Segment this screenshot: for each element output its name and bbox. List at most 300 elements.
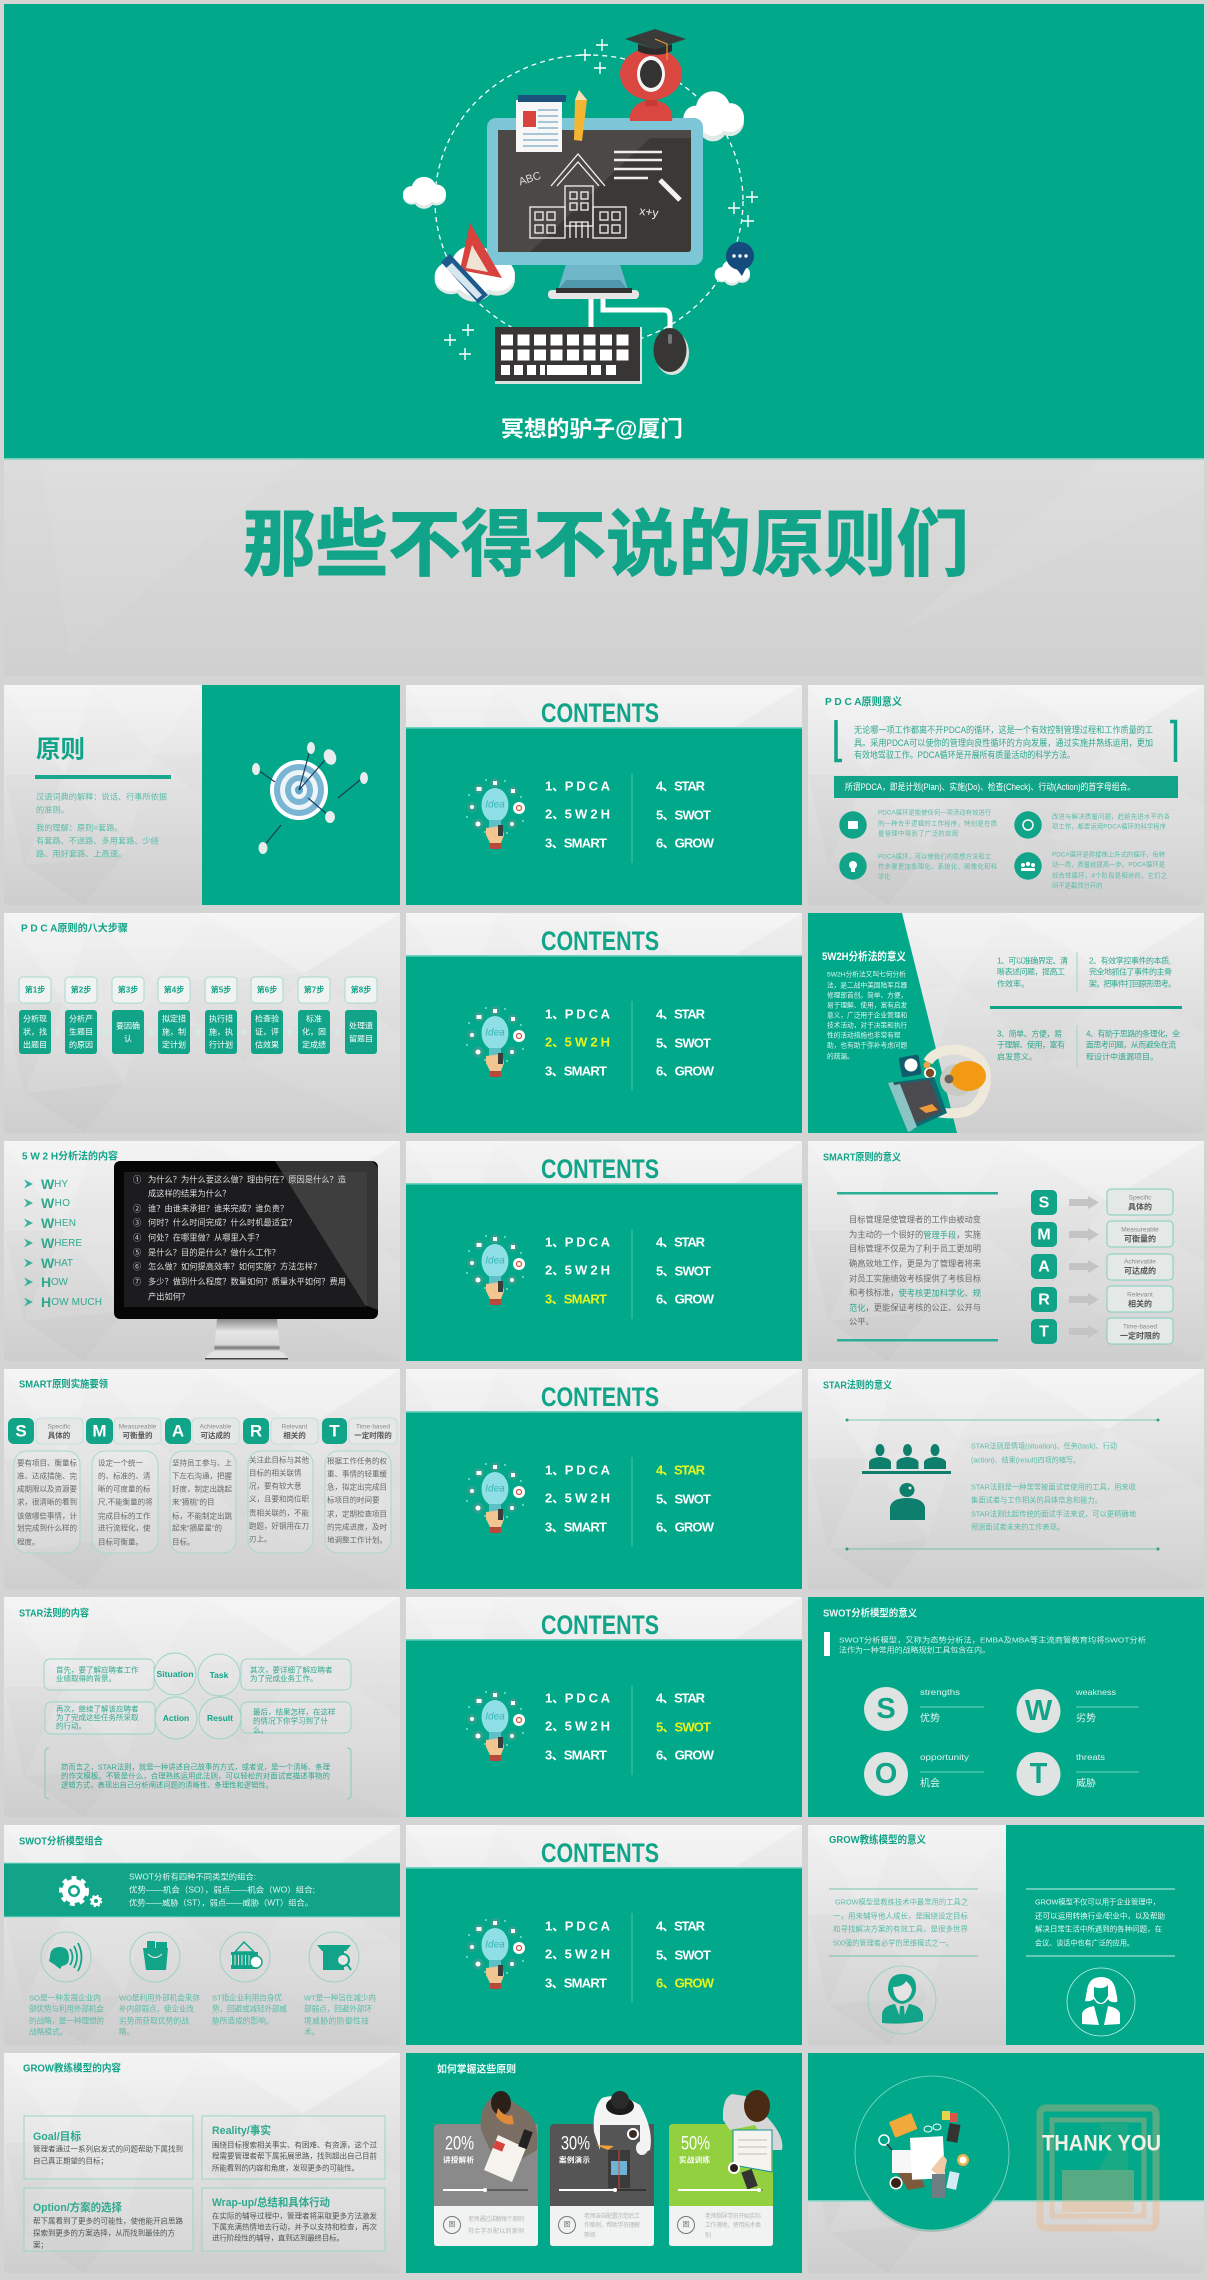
heading: CONTENTS <box>541 926 659 956</box>
icon: idea bulb <box>466 778 525 849</box>
icon: four circled pictograms <box>41 1932 359 1982</box>
contents list: 5、SWOT <box>656 808 711 822</box>
card: 30%: 作案例，帮助学员理解 <box>584 2221 640 2229</box>
contents list <box>545 778 715 850</box>
icon: brackets <box>836 720 1176 762</box>
label texts: Achievable <box>200 1424 232 1430</box>
boxes <box>44 1659 351 1734</box>
text blocks: 面思考问题，从而避免在流 <box>1086 1040 1176 1050</box>
contents list: 6、GROW <box>656 1520 715 1534</box>
contents list: 3、SMART <box>545 1064 607 1078</box>
arrows <box>1069 1196 1099 1338</box>
label texts: Specific <box>1129 1194 1152 1202</box>
step labels <box>25 984 371 994</box>
box headings: Wrap-up/总结和具体行动 <box>212 2195 330 2209</box>
contents list: 3、SMART <box>545 1292 607 1306</box>
card texts: 的完成进度，及时 <box>327 1522 387 1532</box>
step texts: 施，执 <box>209 1026 233 1036</box>
text block: questions: ② <box>133 1204 141 1214</box>
step texts: 定成绩 <box>302 1040 326 1050</box>
card texts: 急，拟定出完成目 <box>327 1482 387 1492</box>
icon: sparkles <box>444 39 758 360</box>
text block: 法作为一种常用的战略规划工具包含在内。 <box>839 1644 990 1654</box>
card texts: 地调整工作计划。 <box>327 1534 387 1544</box>
text block: 范化，更能保证考核的公正、公开与 <box>849 1302 981 1312</box>
step tabs <box>19 977 377 1003</box>
contents list: 2、5 W 2 H <box>545 1490 610 1506</box>
SWOT circles: S <box>876 1693 896 1725</box>
label texts: 可衡量的 <box>122 1430 153 1440</box>
card: 30%: 图 <box>564 2220 570 2228</box>
step labels: 第8步 <box>351 984 371 994</box>
icon: clouds <box>403 91 750 302</box>
text block: 易于理解、使用，富有启发 <box>827 1000 908 1010</box>
SWOT circles: O <box>875 1758 897 1790</box>
heading: CONTENTS <box>541 1838 659 1868</box>
label texts: Achievable <box>1124 1258 1156 1266</box>
text block: 的疏漏。 <box>827 1052 854 1060</box>
text blocks: 晰表述问题，提高工 <box>997 966 1065 976</box>
text blocks: 启发意义。 <box>997 1052 1037 1062</box>
text block: 集面试者与工作相关的具体信息和能力。 <box>971 1494 1102 1504</box>
panel: contents PDCA <box>406 685 802 905</box>
icon: keyboard <box>495 327 642 384</box>
card texts: 标，不能制定出跳 <box>172 1510 232 1520</box>
text block: 我的理解：原则=套路。 <box>36 822 123 832</box>
contents list <box>545 1234 715 1306</box>
text blocks: 学化 <box>878 872 891 880</box>
list: question words: HOW MUCH <box>41 1294 102 1310</box>
card texts: 该做哪些事情，计 <box>17 1510 77 1520</box>
text block: 的作文模板。不管是什么，合理熟练运用此法则，可以轻松的对面试官描述事物的 <box>61 1772 330 1780</box>
text block: questions: ⑤ <box>133 1248 141 1258</box>
step texts: 定计划 <box>162 1040 186 1050</box>
card texts: 重、事情的轻重缓 <box>327 1468 387 1478</box>
contents list: 2、5 W 2 H <box>545 1262 610 1278</box>
contents list: 3、SMART <box>545 1976 607 1990</box>
SWOT labels: 机会 <box>920 1776 940 1790</box>
panel: GROW contents <box>4 2053 400 2273</box>
list: question words: HOW <box>41 1274 69 1290</box>
box texts: 其次，要详细了解应聘者 <box>250 1664 333 1674</box>
text block: 的准则。 <box>36 804 69 814</box>
text block: (action)、结果(result)四项的缩写。 <box>971 1454 1080 1464</box>
text blocks: 术。 <box>304 2026 319 2036</box>
card texts: 完成目标的工作 <box>98 1510 151 1520</box>
box texts: 的情况下你学习到了什 <box>253 1716 328 1726</box>
card texts: 起来“摘星星”的 <box>172 1522 222 1532</box>
contents list: 1、P D C A <box>545 778 611 794</box>
panel: 5W2H meaning <box>808 913 1204 1133</box>
box headings: Reality/事实 <box>212 2123 271 2137</box>
card texts: 尺,不能衡量的将 <box>98 1496 153 1506</box>
icon: gears <box>62 1879 101 1906</box>
label texts <box>1120 1194 1160 1340</box>
SWOT circles: T <box>1030 1758 1048 1790</box>
icon: person at laptop <box>888 1050 986 1132</box>
card: 20%: 图 <box>448 2220 456 2228</box>
text blocks: 综合性循环，4个阶段是相对的，它们之 <box>1052 870 1168 880</box>
circle labels: Result <box>207 1713 233 1723</box>
text block: questions: 多少？做到什么程度？数量如何？质量水平如何？费用 <box>148 1276 346 1286</box>
text block: 优势——机会（SO），弱点——机会（WO）组合; <box>129 1884 315 1894</box>
text block: questions: 谁？由谁来承担？谁来完成？谁负责？ <box>148 1204 288 1214</box>
text blocks: 完全地抓住了事件的主骨 <box>1089 966 1172 976</box>
text block: 逻辑方式，表现出自己分析阐述问题的清晰性、条理性和逻辑性。 <box>61 1780 273 1790</box>
contents list: 4、STAR <box>656 1918 706 1934</box>
text block <box>971 1440 1136 1532</box>
boxes <box>24 2116 385 2251</box>
panel: STAR contents <box>4 1597 400 1817</box>
text blocks: 动一周，质量就提高一步。PDCA循环是 <box>1052 860 1166 868</box>
text block: 目标管理是使管理者的工作由被动变 <box>849 1214 981 1224</box>
text blocks: 战略模式。 <box>29 2026 67 2036</box>
card texts: 目标可衡量。 <box>98 1536 143 1546</box>
text blocks: ST指企业利用自身优 <box>212 1992 282 2002</box>
text blocks: 间不是截然分开的 <box>1052 880 1102 890</box>
contents list: 6、GROW <box>656 1748 715 1762</box>
box texts: 自己真正期望的目标； <box>33 2156 108 2166</box>
step connectors <box>55 1029 340 1035</box>
card: 50%: 实战训练 <box>679 2154 710 2164</box>
label texts: Time-based <box>356 1424 390 1430</box>
contents list: 1、P D C A <box>545 1006 611 1022</box>
text block: 性的活动措施也非常有帮 <box>827 1030 901 1040</box>
card texts: 坚持员工参与、上 <box>172 1458 232 1468</box>
text block: left: GROW模型是教练技术中最常用的工具之 <box>835 1896 968 1906</box>
icon: chat bubble <box>726 242 754 276</box>
card: 50%: 别 <box>705 2231 711 2239</box>
text blocks: 部优势与利用外部机会 <box>29 2004 104 2014</box>
heading: SMART原则的意义 <box>823 1150 901 1164</box>
icon: desk circle <box>855 2076 1009 2232</box>
card texts: 义，且要和岗位职 <box>249 1494 309 1504</box>
text block: 目标管理不仅是为了利于员工更加明 <box>849 1244 981 1254</box>
list: question words: WHEN <box>41 1215 76 1231</box>
label texts: Relevant <box>1127 1292 1153 1298</box>
heading: P D C A原则的八大步骤 <box>21 922 128 934</box>
panel: contents 5W2H <box>406 913 802 1133</box>
SWOT labels: threats <box>1076 1752 1105 1762</box>
card texts <box>17 1454 387 1546</box>
label texts: Relevant <box>282 1424 308 1430</box>
label texts: 一定时限的 <box>354 1430 392 1440</box>
panel: title banner <box>4 460 1204 676</box>
card: 30%: 案例演示 <box>559 2154 590 2164</box>
text blocks: 胁所造成的影响。 <box>212 2016 274 2026</box>
card texts: 目标。 <box>172 1536 194 1546</box>
text blocks: 部弱点，回避外部环 <box>304 2004 372 2014</box>
card texts: 准、达成措施、完 <box>17 1470 77 1480</box>
heading: GROW教练模型的内容 <box>23 2062 121 2074</box>
text block: 公平。 <box>849 1318 874 1326</box>
text block: 技术活动，对于决策和执行 <box>827 1020 908 1030</box>
step texts: 施，制 <box>162 1026 186 1036</box>
letter badges <box>8 1418 347 1444</box>
label texts: 一定时限的 <box>1120 1330 1160 1340</box>
panel: GROW meaning <box>808 1825 1204 2045</box>
list: question words: WHAT <box>41 1255 73 1271</box>
card: 50%: 工作落地，使用技术类 <box>705 2221 761 2229</box>
icon: dashed orbit <box>435 55 743 347</box>
panel: STAR meaning <box>808 1369 1204 1589</box>
SMART letters <box>1031 1190 1057 1344</box>
SMART letters: A <box>1038 1258 1050 1276</box>
step texts: 估效果 <box>255 1040 279 1050</box>
icon: mouse <box>654 328 689 375</box>
text blocks <box>878 808 1171 890</box>
contents list: 1、P D C A <box>545 1918 611 1934</box>
step texts: 检查验 <box>255 1014 279 1024</box>
box headings: Option/方案的选择 <box>33 2200 122 2214</box>
text blocks: 势，回避或减轻外部威 <box>212 2004 287 2014</box>
icon: computer monitor: ABC <box>517 170 543 188</box>
icons: four circles <box>839 811 1042 880</box>
text block: left: 和寻找解决方案的有效工具，是很多世界 <box>833 1924 968 1934</box>
card: 30%: 老师亲自配置示范后工 <box>584 2212 640 2220</box>
text blocks: 的战略，是一种理想的 <box>29 2016 104 2026</box>
heading: 5W2H分析法的意义 <box>822 949 906 963</box>
box texts: 帮下属看到了更多的可能性，使他能开启思路 <box>33 2216 184 2226</box>
box texts <box>33 2140 378 2250</box>
SMART letters: T <box>1039 1324 1049 1340</box>
card texts: 划完成到什么样的 <box>17 1522 77 1532</box>
text blocks: 架，把事件打回原形思考。 <box>1089 978 1176 988</box>
card texts: 跑题，好钢用在刀 <box>249 1520 309 1530</box>
card texts: 晰的可度量的标 <box>98 1484 151 1494</box>
SWOT labels: strengths <box>920 1687 960 1697</box>
contents list: 4、STAR <box>656 1234 706 1250</box>
step labels: 第4步 <box>164 984 184 994</box>
heading: CONTENTS <box>541 698 659 728</box>
band <box>4 1862 400 1918</box>
card: 20%: 符合学员配以的案例 <box>468 2227 524 2235</box>
card: 20% <box>434 2091 538 2246</box>
contents list: 3、SMART <box>545 1520 607 1534</box>
text block: 为主动的一个很好的管理手段，实施 <box>849 1230 981 1240</box>
card: 20%: 老师通过讲解每个原则 <box>468 2215 524 2223</box>
label boxes <box>36 1418 397 1444</box>
text block <box>854 724 1153 760</box>
text block: 有套路、不迷路、多用套路、少绕 <box>36 836 159 846</box>
icon: idea bulb <box>466 1918 525 1989</box>
panel: PDCA eight steps <box>4 913 400 1133</box>
SMART letters: M <box>1037 1226 1051 1244</box>
heading: STAR法则的意义 <box>823 1378 892 1392</box>
closing text: THANK YOU <box>1042 2130 1161 2156</box>
text blocks: PDCA循环，可以使我们的思想方法和工 <box>878 852 991 860</box>
card texts: 来“摘桃”的目 <box>172 1496 214 1506</box>
heading: 5 W 2 H分析法的内容 <box>22 1150 118 1162</box>
SWOT labels: weakness <box>1075 1687 1116 1697</box>
step texts: 执行措 <box>209 1014 233 1024</box>
panel: SWOT combinations <box>4 1825 400 2045</box>
box texts: 探索到更多的方案选择，从而找到最佳的方 <box>33 2228 176 2238</box>
icon: ruler and set square <box>441 223 502 303</box>
bracket frame <box>45 1748 351 1799</box>
card texts: 求，很清晰的看到 <box>17 1496 77 1506</box>
circle labels: Situation <box>156 1669 194 1679</box>
label texts: 相关的 <box>1128 1298 1152 1308</box>
heading: CONTENTS <box>541 1382 659 1412</box>
card: 20%: 20% <box>445 2134 474 2154</box>
text block: 路、用好套路、上高速。 <box>36 848 126 858</box>
letter badges: T <box>329 1422 340 1440</box>
text block <box>849 1214 981 1326</box>
step texts: 证，评 <box>255 1028 279 1036</box>
SWOT labels: 劣势 <box>1076 1712 1096 1724</box>
box texts: 业绩取得的背景。 <box>56 1673 116 1683</box>
text block: 汉语词典的解释：说话、行事所依据 <box>36 792 167 802</box>
box texts: 围绕目标搜索相关事实、有困难、有资源，这个过 <box>212 2140 378 2150</box>
heading: CONTENTS <box>541 1154 659 1184</box>
circles <box>154 1653 241 1739</box>
icon: woman in circle <box>1067 1968 1135 2036</box>
card: 30% <box>550 2091 654 2246</box>
text block: 优势——威胁（ST），弱点——威胁（WT）组合。 <box>129 1898 313 1908</box>
contents list: 5、SWOT <box>656 1720 711 1734</box>
text block: questions <box>133 1174 346 1302</box>
icon: interview panel <box>862 1444 951 1520</box>
text block: 具。采用PDCA可以使你的管理向良性循环的方向发展，通过实施并熟练运用，更加 <box>854 737 1153 748</box>
step boxes <box>19 1010 377 1054</box>
icon: idea bulb <box>466 1462 525 1533</box>
label texts: 相关的 <box>283 1430 306 1440</box>
text block: questions: ③ <box>133 1218 141 1228</box>
panel: contents SWOT <box>406 1597 802 1817</box>
list: question words: WHERE <box>41 1235 82 1251</box>
text block: questions: 何时？什么时间完成？什么时机最适宜？ <box>148 1218 296 1228</box>
label texts: Time-based <box>1123 1324 1157 1330</box>
contents list: 4、STAR <box>656 1690 706 1706</box>
text block: 有效地驾驭工作。PDCA循环是开展所有质量活动的科学方法。 <box>854 749 1075 760</box>
text blocks: 改进与解决质量问题，赶超先进水平的各 <box>1052 812 1171 820</box>
step labels: 第7步 <box>304 984 324 994</box>
contents list: 1、P D C A <box>545 1462 611 1478</box>
label texts: 可衡量的 <box>1124 1234 1156 1244</box>
contents list: 1、P D C A <box>545 1690 611 1706</box>
card texts: 关注此目标与其他 <box>249 1454 309 1464</box>
step labels: 第3步 <box>118 984 138 994</box>
box texts: 所能看到的内容和角度，发现更多的可能性。 <box>212 2162 359 2172</box>
contents list <box>545 1690 715 1762</box>
step labels: 第2步 <box>71 984 91 994</box>
step texts: 留题目 <box>349 1034 373 1044</box>
contents list: 2、5 W 2 H <box>545 1034 610 1050</box>
box texts: 管理者通过一系列启发式的问题帮助下属找到 <box>33 2144 183 2154</box>
text block: questions: ⑦ <box>133 1278 141 1286</box>
text blocks: 程设计中遗漏项目。 <box>1086 1052 1158 1062</box>
text block: left: 500强的管理者必学的思维模式之一。 <box>833 1938 953 1948</box>
text blocks <box>29 1992 376 2036</box>
dividers <box>990 952 1182 1067</box>
text block: questions: ④ <box>133 1234 141 1242</box>
box texts: 下属充满热情地去行动，并予以支持和检查，再次 <box>212 2222 378 2232</box>
text blocks: 补内部弱点，使企业改 <box>119 2004 194 2014</box>
SWOT labels: opportunity <box>920 1752 970 1762</box>
icon: man in circle <box>868 1966 936 2034</box>
box texts: 为了完成这些任务所采取 <box>56 1712 139 1722</box>
text block: 确高效地工作，更是为了管理者将来 <box>849 1258 981 1268</box>
panel: SMART meaning <box>808 1141 1204 1361</box>
step texts: 处理遗 <box>349 1020 373 1030</box>
text block: questions: ① <box>133 1176 141 1184</box>
SWOT labels: 威胁 <box>1076 1776 1096 1790</box>
text block <box>61 1762 331 1790</box>
card texts: 设定一个统一 <box>98 1458 143 1468</box>
label texts: 可达成的 <box>200 1430 231 1440</box>
text block <box>839 1634 1146 1654</box>
box texts: 再次，继续了解该应聘者 <box>56 1704 139 1714</box>
step labels: 第6步 <box>257 984 277 994</box>
text block: 意义，广泛用于企业管理和 <box>827 1010 908 1020</box>
text blocks: 3、简单、方便，易 <box>997 1028 1062 1038</box>
text block: questions: 何处？在哪里做？从哪里入手？ <box>148 1232 264 1242</box>
icon: idea bulb <box>466 1006 525 1077</box>
icon: idea bulb <box>466 1234 525 1305</box>
text block: right <box>1035 1896 1165 1948</box>
contents list: 5、SWOT <box>656 1492 711 1506</box>
text block: questions: 为什么？为什么要这么做？理由何在？原因是什么？造 <box>148 1174 346 1184</box>
text block <box>129 1872 315 1908</box>
contents list: 4、STAR <box>656 778 706 794</box>
cards <box>14 1451 391 1553</box>
card texts: 目标的相关联情 <box>249 1468 302 1478</box>
text blocks: 项工作，都要运用PDCA循环的科学程序 <box>1052 822 1166 830</box>
text blocks: 2、有效掌控事件的本质, <box>1089 956 1171 966</box>
text blocks: 于理解、使用，富有 <box>997 1040 1065 1050</box>
heading: GROW教练模型的意义 <box>829 1833 926 1846</box>
card texts: 根据工作任务的权 <box>327 1456 387 1466</box>
step texts: 标准 <box>306 1014 322 1024</box>
card texts: 况，要有较大意 <box>249 1480 302 1490</box>
text block: 预测面试者未来的工作表现。 <box>971 1522 1064 1532</box>
box texts: 首先，要了解应聘者工作 <box>56 1664 139 1674</box>
label texts: Measureable <box>1121 1226 1159 1234</box>
box texts: 进行阶段性的辅导，直到达到最终目标。 <box>212 2232 344 2242</box>
panel: contents SMART <box>406 1141 802 1361</box>
step texts: 要因确 <box>116 1020 140 1030</box>
contents list: 4、STAR <box>656 1462 706 1478</box>
contents list: 4、STAR <box>656 1006 706 1022</box>
label texts: 具体的 <box>1128 1202 1152 1212</box>
text blocks: PDCA循环是爬楼梯上升式的循环，每转 <box>1052 850 1166 858</box>
text block: 修理部首创。简单、方便， <box>827 990 907 1000</box>
letter badges: A <box>172 1422 184 1440</box>
SWOT circles <box>864 1687 1060 1796</box>
text block: 助，也有助于弥补考虑问题 <box>827 1040 908 1050</box>
contents list: 3、SMART <box>545 1748 607 1762</box>
contents list: 1、P D C A <box>545 1234 611 1250</box>
callout band: 所谓PDCA，即是计划(Plan)、实施(Do)、检查(Check)、行动(Action)的首字母组合。 <box>845 781 1135 792</box>
card texts: 刃上。 <box>249 1534 272 1544</box>
text block: right: 解决日常生活中所遇到的各种问题，在 <box>1035 1924 1162 1934</box>
box texts: 在实际的辅导过程中，管理者将采取更多方法激发 <box>212 2210 378 2220</box>
text block: 5W2H分析法又叫七何分析 <box>827 970 906 978</box>
text block: questions: 产出如何？ <box>148 1292 189 1302</box>
panel: SWOT meaning <box>808 1597 1204 1817</box>
letter badges: M <box>92 1422 107 1440</box>
heading: 如何掌握这些原则 <box>437 2062 516 2076</box>
label texts <box>48 1424 392 1440</box>
text blocks: 的一种合乎逻辑的工作程序，特别是在质 <box>878 818 997 828</box>
contents list: 5、SWOT <box>656 1948 711 1962</box>
text block: questions: 成这样的结果为什么？ <box>148 1188 230 1198</box>
heading: SMART原则实施要领 <box>19 1378 108 1390</box>
heading: SWOT分析模型的意义 <box>823 1606 917 1620</box>
step texts: 拟定措 <box>162 1014 186 1024</box>
card texts: 成期限以及资源要 <box>17 1484 77 1494</box>
